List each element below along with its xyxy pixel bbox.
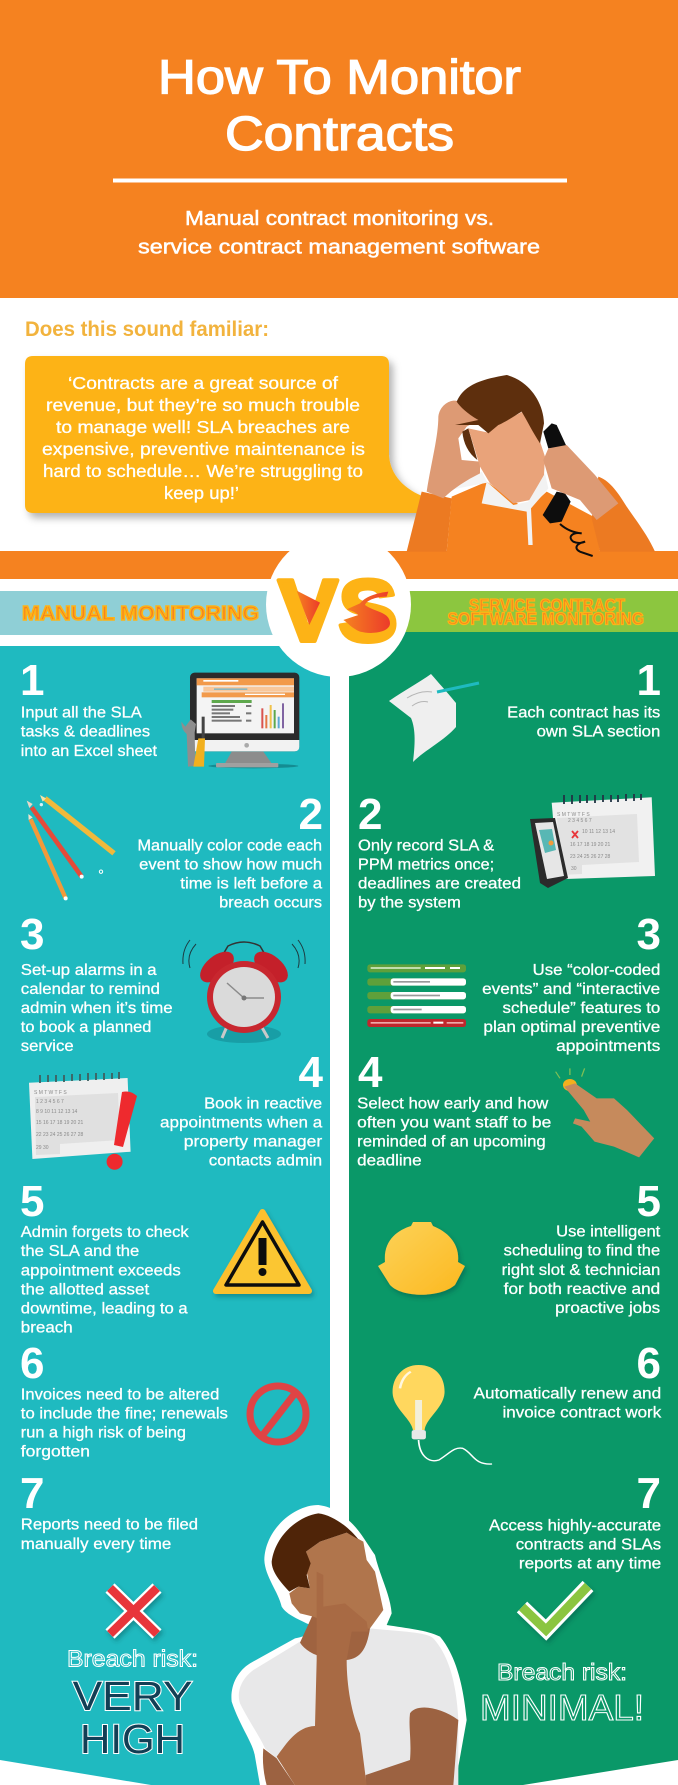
subtitle: service contract management software	[138, 236, 540, 258]
icon: red cross	[110, 1588, 157, 1634]
illustration: man on the phone	[407, 375, 655, 556]
step 7 right: 7	[637, 1469, 661, 1518]
step 6 right: 6	[637, 1339, 661, 1388]
step 1 right: 1	[637, 656, 661, 705]
step 2 left: event to show how much	[139, 857, 322, 874]
icon: calendar with exclamation mark: S M T W T F S	[34, 1090, 67, 1096]
step 4 left: Book in reactive	[204, 1095, 322, 1112]
breach risk: very high: Breach risk:	[67, 1646, 198, 1672]
step 3 right: appointments	[556, 1038, 660, 1055]
banner: manual monitoring	[0, 591, 300, 635]
header panel	[0, 0, 678, 298]
step 5 left: appointment exceeds	[21, 1263, 181, 1280]
step 1 right	[507, 656, 661, 741]
step 4 left: appointments when a	[160, 1114, 322, 1131]
step 4 left: property manager	[184, 1134, 323, 1151]
orange band	[0, 551, 678, 579]
speech bubble	[25, 356, 425, 513]
step 7 left: Reports need to be filed	[21, 1517, 198, 1534]
quote text: keep up!’	[164, 483, 239, 503]
icon: calendar with exclamation mark	[29, 1072, 137, 1170]
step 1 left: tasks & deadlines	[21, 724, 150, 741]
icon: calendar with exclamation mark: 29 30	[36, 1145, 49, 1151]
step 7 left	[20, 1469, 198, 1553]
step 2 right: PPM metrics once;	[358, 857, 494, 874]
subtitle: Manual contract monitoring vs.	[185, 208, 494, 230]
title: Contracts	[225, 108, 454, 161]
step 6 left	[20, 1339, 228, 1460]
step 4 right	[357, 1048, 551, 1170]
icon: warning triangle	[216, 1212, 309, 1291]
panel: manual monitoring	[0, 646, 330, 1785]
step 6 left: run a high risk of being	[21, 1424, 186, 1441]
step 5 right: right slot & technician	[502, 1262, 660, 1279]
step 5 left: 5	[20, 1177, 44, 1226]
step 3 left	[20, 910, 173, 1055]
breach risk: minimal: MINIMAL!	[480, 1687, 644, 1728]
banner: service contract software monitoring	[380, 591, 678, 632]
step 4 right: deadline	[357, 1153, 422, 1170]
banner: manual monitoring: MANUAL MONITORING	[22, 603, 259, 625]
quote text: ‘Contracts are a great source of	[68, 373, 338, 393]
breach risk: minimal	[480, 1659, 644, 1728]
step 3 left: calendar to remind	[21, 981, 160, 998]
step 4 left: contacts admin	[209, 1153, 322, 1170]
step 7 right: Access highly-accurate	[489, 1518, 661, 1535]
step 5 right: Use intelligent	[556, 1224, 661, 1241]
step 4 right: 4	[358, 1048, 383, 1097]
subtitle	[138, 208, 540, 258]
step 2 right	[358, 790, 521, 912]
step 2 left: 2	[299, 790, 323, 839]
step 5 right: for both reactive and	[504, 1281, 660, 1298]
breach risk: very high	[67, 1646, 198, 1762]
icon: calendar and phone: 30	[571, 866, 577, 872]
step 5 right: scheduling to find the	[504, 1243, 660, 1260]
icon: computer monitor	[181, 673, 299, 768]
quote text: revenue, but they’re so much trouble	[46, 395, 360, 415]
step 7 right: contracts and SLAs	[516, 1537, 661, 1554]
icon: hard hat	[378, 1222, 465, 1295]
right column steps	[357, 656, 662, 1728]
step 1 left	[20, 656, 158, 760]
illustration: thinking man	[231, 1505, 467, 1785]
step 5 right: proactive jobs	[555, 1300, 660, 1317]
icon: pointing hand	[556, 1068, 654, 1157]
title: How To Monitor	[158, 52, 521, 104]
step 3 right: plan optimal preventive	[483, 1019, 660, 1036]
step 1 left: 1	[20, 656, 44, 705]
quote text	[42, 373, 365, 503]
icon: calendar and phone	[530, 794, 655, 888]
step 4 right: Select how early and how	[357, 1095, 549, 1112]
step 1 right: own SLA section	[537, 724, 660, 741]
icon: light bulb	[393, 1365, 492, 1464]
icon: calendar with exclamation mark: 1 2 3 4 5 6 7	[36, 1099, 64, 1105]
breach risk: very high: HIGH	[80, 1716, 185, 1762]
step 5 right: 5	[637, 1177, 661, 1226]
quote text: to manage well! SLA breaches are	[56, 417, 350, 437]
icon: calendar with exclamation mark: 15 16 17 18 19 20 21	[36, 1120, 83, 1126]
icon: color-coded schedule	[367, 964, 466, 1027]
quote text: expensive, preventive maintenance is	[42, 439, 365, 459]
quote text: hard to schedule… We’re struggling to	[43, 461, 363, 481]
step 2 right: Only record SLA &	[358, 838, 495, 855]
step 3 right: events” and “interactive	[482, 981, 660, 998]
icon: calendar with exclamation mark: 8 9 10 11 12 13 14	[36, 1109, 78, 1115]
vs badge	[266, 532, 411, 680]
icon: calendar and phone: 23 24 25 26 27 28	[570, 854, 611, 860]
step 5 left: Admin forgets to check	[21, 1224, 190, 1241]
step 3 left: Set-up alarms in a	[21, 962, 157, 979]
step 7 left: manually every time	[21, 1536, 171, 1553]
icon: colored pencils	[27, 795, 114, 900]
icon: calendar and phone: 2 3 4 5 6 7	[568, 818, 592, 824]
step 2 right: deadlines are created	[358, 876, 521, 893]
step 4 left	[160, 1048, 324, 1170]
step 2 left: Manually color code each	[138, 838, 322, 855]
step 3 left: to book a planned	[21, 1019, 151, 1036]
step 5 left	[20, 1177, 190, 1337]
step 4 right: reminded of an upcoming	[357, 1134, 546, 1151]
step 3 left: 3	[20, 910, 44, 959]
breach risk: minimal: Breach risk:	[497, 1659, 627, 1685]
step 7 right: reports at any time	[519, 1556, 661, 1573]
step 6 left: forgotten	[21, 1443, 90, 1460]
step 2 right: 2	[358, 790, 382, 839]
step 1 left: Input all the SLA	[21, 705, 142, 722]
icon: contract paper and pen	[389, 674, 479, 762]
step 6 left: 6	[20, 1339, 44, 1388]
icon: green check mark	[522, 1586, 588, 1630]
step 4 right: often you want staff to be	[357, 1114, 551, 1131]
step 3 right	[482, 910, 661, 1055]
icon: prohibition sign	[250, 1386, 306, 1442]
step 5 left: breach	[21, 1320, 73, 1337]
icon: calendar with exclamation mark: 22 23 24 25 26 27 28	[36, 1132, 83, 1138]
step 4 left: 4	[299, 1048, 324, 1097]
banner: service contract software monitoring: SOFTWARE MONITORING	[448, 608, 644, 628]
icon: calendar and phone: 16 17 18 19 20 21	[570, 842, 611, 848]
step 1 left: into an Excel sheet	[21, 743, 158, 760]
step 7 right	[489, 1469, 661, 1573]
step 6 right: Automatically renew and	[474, 1386, 661, 1403]
icon: alarm clock	[183, 940, 305, 1043]
step 1 right: Each contract has its	[507, 705, 660, 722]
step 2 left	[138, 790, 323, 912]
step 6 left: to include the fine; renewals	[21, 1405, 228, 1422]
step 2 right: by the system	[358, 895, 461, 912]
step 7 left: 7	[20, 1469, 44, 1518]
panel: software monitoring	[349, 632, 678, 1785]
step 5 left: downtime, leading to a	[21, 1301, 188, 1318]
icon: calendar and phone: 10 11 12 13 14	[582, 829, 615, 835]
step 3 right: 3	[637, 910, 661, 959]
step 5 left: the allotted asset	[21, 1282, 150, 1299]
step 3 left: service	[21, 1038, 74, 1055]
heading: does this sound familiar: Does this sound familiar:	[25, 318, 269, 341]
step 6 right: invoice contract work	[502, 1405, 662, 1422]
step 6 left: Invoices need to be altered	[21, 1386, 219, 1403]
vs badge: VS	[278, 561, 398, 660]
step 5 left: the SLA and the	[21, 1243, 139, 1260]
step 3 right: Use “color-coded	[533, 962, 660, 979]
title	[158, 52, 521, 161]
breach risk: very high: VERY	[73, 1673, 193, 1719]
step 6 right	[474, 1339, 662, 1422]
step 3 left: admin when it’s time	[21, 1000, 173, 1017]
banner: service contract software monitoring: SERVICE CONTRACT	[469, 595, 625, 615]
step 2 left: breach occurs	[219, 895, 322, 912]
left column steps	[20, 656, 324, 1762]
icon: calendar and phone: S M T W T F S	[557, 812, 590, 818]
step 5 right	[502, 1177, 661, 1317]
step 2 left: time is left before a	[180, 876, 322, 893]
step 3 right: schedule” features to	[502, 1000, 660, 1017]
